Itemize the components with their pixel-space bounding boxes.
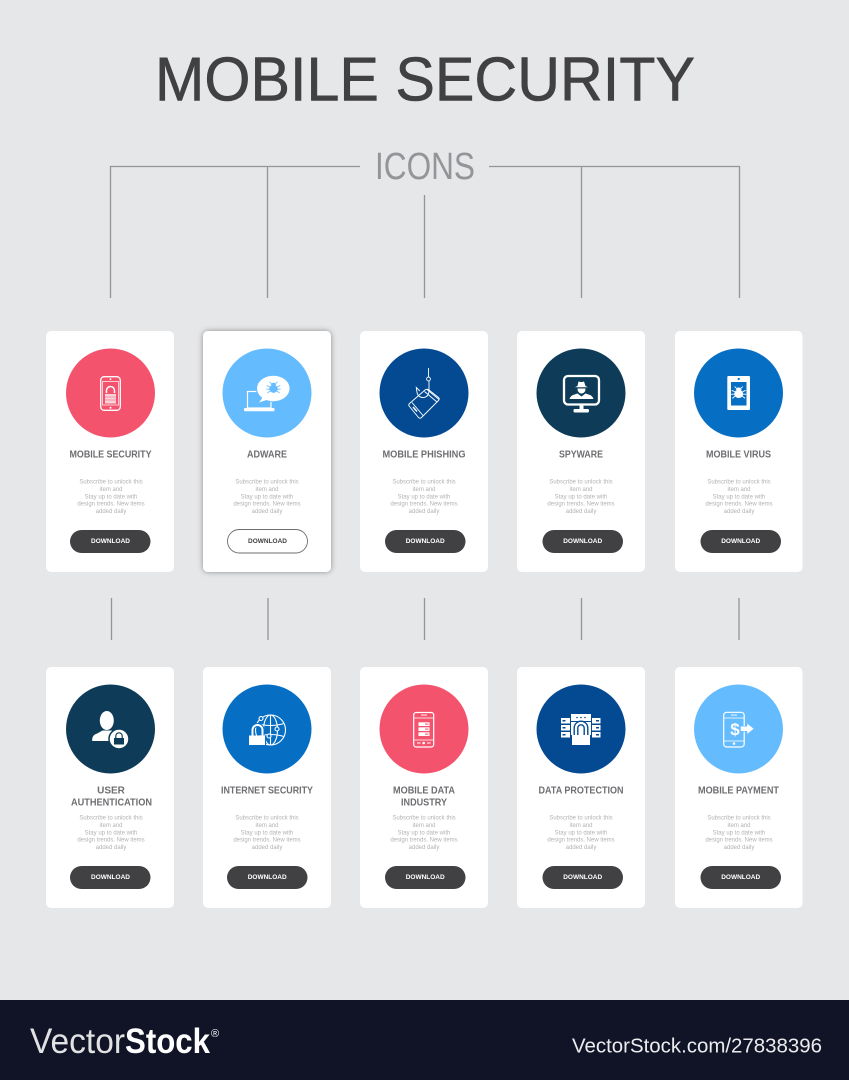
text block: Stay up to date with [713, 830, 765, 836]
footer bar [0, 1000, 849, 1080]
logo: VectorStock: Stock [125, 1022, 210, 1061]
text block: added daily [96, 845, 126, 851]
heading: internet security: INTERNET SECURITY [221, 786, 313, 796]
heading: spyware: SPYWARE [559, 450, 603, 460]
heading: mobile data industry: MOBILE DATA [393, 786, 455, 796]
button: DOWNLOAD [563, 538, 602, 545]
text block: added daily [566, 509, 596, 515]
button: DOWNLOAD [563, 874, 602, 881]
text block: item and [255, 487, 279, 493]
panel: data protection [517, 667, 645, 908]
text block: design trends. New items [547, 502, 615, 508]
text block: Stay up to date with [555, 494, 607, 500]
text block: design trends. New items [233, 838, 301, 844]
panel: mobile data industry [360, 667, 488, 908]
button [700, 530, 781, 553]
heading: mobile virus: MOBILE VIRUS [706, 450, 771, 460]
text block [547, 480, 615, 515]
text block: item and [412, 487, 436, 493]
button: DOWNLOAD [91, 874, 130, 881]
button [542, 866, 623, 889]
heading: user authentication [71, 786, 152, 808]
panel: mobile phishing [360, 331, 488, 572]
text block: Subscribe to unlock this [707, 816, 771, 822]
text block: added daily [409, 509, 439, 515]
text block: item and [727, 823, 751, 829]
logo: VectorStock [30, 1022, 219, 1061]
icon: servers with padlock [561, 714, 600, 745]
panel: mobile virus [675, 331, 802, 572]
text block: design trends. New items [77, 502, 145, 508]
panel: spyware [517, 331, 645, 572]
text block: Stay up to date with [85, 494, 137, 500]
text block: added daily [252, 845, 282, 851]
icon: phone with dollar and arrow: $ [730, 720, 740, 739]
icon: phone with padlock [101, 377, 120, 410]
text block: Stay up to date with [85, 830, 137, 836]
button [70, 866, 150, 889]
image id: VectorStock.com/27838396 [572, 1036, 822, 1058]
title: MOBILE SECURITY [155, 46, 695, 114]
icon: globe with padlock [249, 715, 286, 746]
button [542, 530, 623, 553]
text block: Stay up to date with [398, 494, 450, 500]
button: DOWNLOAD [721, 538, 760, 545]
text block: design trends. New items [390, 502, 458, 508]
text block: Subscribe to unlock this [79, 480, 143, 486]
text block [77, 816, 145, 851]
text block: design trends. New items [705, 502, 773, 508]
icon: phone on fishing hook [409, 368, 439, 418]
heading: mobile security: MOBILE SECURITY [70, 450, 152, 460]
heading: mobile data industry: INDUSTRY [401, 798, 447, 808]
text block: added daily [409, 845, 439, 851]
text block: Subscribe to unlock this [235, 816, 299, 822]
icon: laptop with bug speech bubble [244, 375, 291, 411]
text block: Stay up to date with [398, 830, 450, 836]
text block: item and [99, 823, 123, 829]
heading: mobile data industry [393, 786, 455, 808]
text block [390, 480, 458, 515]
text block: item and [412, 823, 436, 829]
subtitle: icons: ICONS [375, 146, 475, 188]
text block: Stay up to date with [241, 830, 293, 836]
text block [77, 480, 145, 515]
button [385, 866, 466, 889]
button [385, 530, 466, 553]
connector lines: between rows [112, 598, 739, 640]
text block: Stay up to date with [555, 830, 607, 836]
text block: item and [255, 823, 279, 829]
text block: Stay up to date with [713, 494, 765, 500]
button: DOWNLOAD [721, 874, 760, 881]
heading: user authentication: AUTHENTICATION [71, 798, 152, 808]
logo: VectorStock: Vector [30, 1022, 125, 1061]
text block: Subscribe to unlock this [707, 480, 771, 486]
text block: item and [569, 823, 593, 829]
text block: added daily [566, 845, 596, 851]
panel: mobile payment [675, 667, 802, 908]
text block: design trends. New items [77, 838, 145, 844]
text block [233, 480, 301, 515]
button: DOWNLOAD [248, 874, 287, 881]
button: DOWNLOAD [406, 874, 445, 881]
connector lines: top tree [110, 166, 740, 298]
text block: added daily [96, 509, 126, 515]
text block: Subscribe to unlock this [549, 480, 613, 486]
button [70, 530, 150, 553]
heading: user authentication: USER [97, 786, 126, 796]
panel: mobile security [46, 331, 174, 572]
text block: added daily [724, 845, 754, 851]
text block: item and [99, 487, 123, 493]
text block: item and [727, 487, 751, 493]
text block: added daily [724, 509, 754, 515]
text block [390, 816, 458, 851]
text block: Subscribe to unlock this [392, 816, 456, 822]
text block [705, 816, 773, 851]
text block: added daily [252, 509, 282, 515]
text block: design trends. New items [390, 838, 458, 844]
heading: mobile payment: MOBILE PAYMENT [698, 786, 779, 796]
panel: user authentication [46, 667, 174, 908]
text block: design trends. New items [705, 838, 773, 844]
icon: user with lock [92, 711, 129, 749]
text block: design trends. New items [547, 838, 615, 844]
text block: item and [569, 487, 593, 493]
heading: data protection: DATA PROTECTION [538, 786, 624, 796]
icon: phone with dollar and arrow [724, 712, 754, 747]
button: DOWNLOAD [406, 538, 445, 545]
heading: mobile phishing: MOBILE PHISHING [382, 450, 466, 460]
icon: phone with data rows [414, 712, 434, 747]
button: outlined: DOWNLOAD [248, 538, 287, 545]
text block: Subscribe to unlock this [79, 816, 143, 822]
text block: Subscribe to unlock this [549, 816, 613, 822]
text block: design trends. New items [233, 502, 301, 508]
logo: VectorStock: ® [211, 1028, 219, 1040]
button: outlined [228, 530, 308, 553]
text block [233, 816, 301, 851]
button [227, 866, 308, 889]
heading: adware: ADWARE [247, 450, 287, 460]
button: DOWNLOAD [91, 538, 130, 545]
icon: monitor with spy [564, 376, 599, 412]
text block: Subscribe to unlock this [235, 480, 299, 486]
button [700, 866, 781, 889]
text block [705, 480, 773, 515]
text block: Stay up to date with [241, 494, 293, 500]
panel: adware (highlighted) [203, 331, 331, 572]
text block [547, 816, 615, 851]
text block: Subscribe to unlock this [392, 480, 456, 486]
icon: phone with bug [727, 376, 750, 410]
panel: internet security [203, 667, 331, 908]
